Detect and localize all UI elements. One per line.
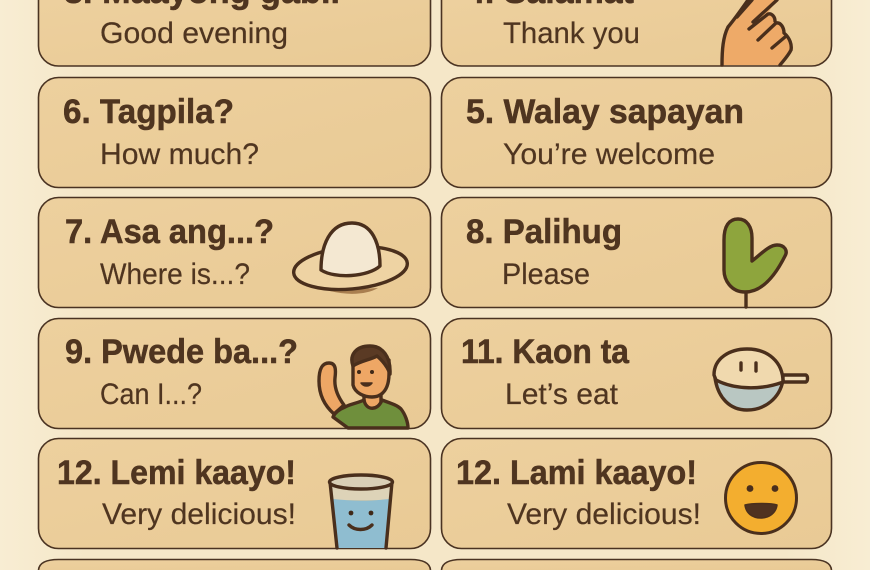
panel: where is — [38, 198, 430, 308]
panel: Lemi kaayo: Very delicious! — [102, 498, 296, 531]
panel: thank you — [442, 0, 832, 66]
panel: can I — [38, 318, 430, 428]
panel: can I: Can I...? — [100, 378, 202, 411]
icon: waving person — [319, 346, 408, 428]
panel: Lemi kaayo — [38, 438, 430, 548]
panel: you're welcome: You’re welcome — [503, 138, 715, 171]
heading: Lami kaayo: 12. Lami kaayo! — [456, 454, 697, 492]
panel: thank you: Thank you — [503, 17, 640, 50]
heading: Tagpila: 6. Tagpila? — [63, 93, 234, 131]
panel: please: Please — [502, 258, 590, 291]
panel: good evening: Good evening — [100, 17, 288, 50]
heading: Kaon ta: 11. Kaon ta — [461, 333, 630, 371]
panel: please — [442, 198, 832, 308]
panel: how much — [38, 78, 430, 188]
heading: Pwede ba: 9. Pwede ba...? — [65, 333, 298, 371]
panel: how much: How much? — [100, 138, 259, 171]
panel: good evening — [38, 0, 430, 66]
heading: Palihug: 8. Palihug — [466, 213, 622, 251]
panel: you're welcome — [442, 78, 832, 188]
panel: Lami kaayo — [442, 438, 832, 548]
panel: Lami kaayo: Very delicious! — [507, 498, 701, 531]
panel: let's eat: Let’s eat — [505, 378, 619, 411]
icon: hat — [292, 223, 409, 294]
panel: where is: Where is...? — [100, 258, 250, 291]
heading: Lemi kaayo: 12. Lemi kaayo! — [57, 454, 296, 492]
icon: hand — [722, 0, 791, 65]
panel: bottom right cropped card — [442, 560, 832, 570]
icon: smiley face — [726, 462, 796, 534]
heading: Asa ang: 7. Asa ang...? — [65, 213, 274, 251]
heading: Walay sapayan: 5. Walay sapayan — [466, 93, 744, 131]
panel: bottom left cropped card — [38, 560, 430, 570]
icon: smiling water glass — [330, 475, 392, 548]
icon: pot — [714, 349, 808, 410]
panel: let's eat — [442, 318, 832, 428]
icon: leaf plant — [724, 219, 786, 307]
